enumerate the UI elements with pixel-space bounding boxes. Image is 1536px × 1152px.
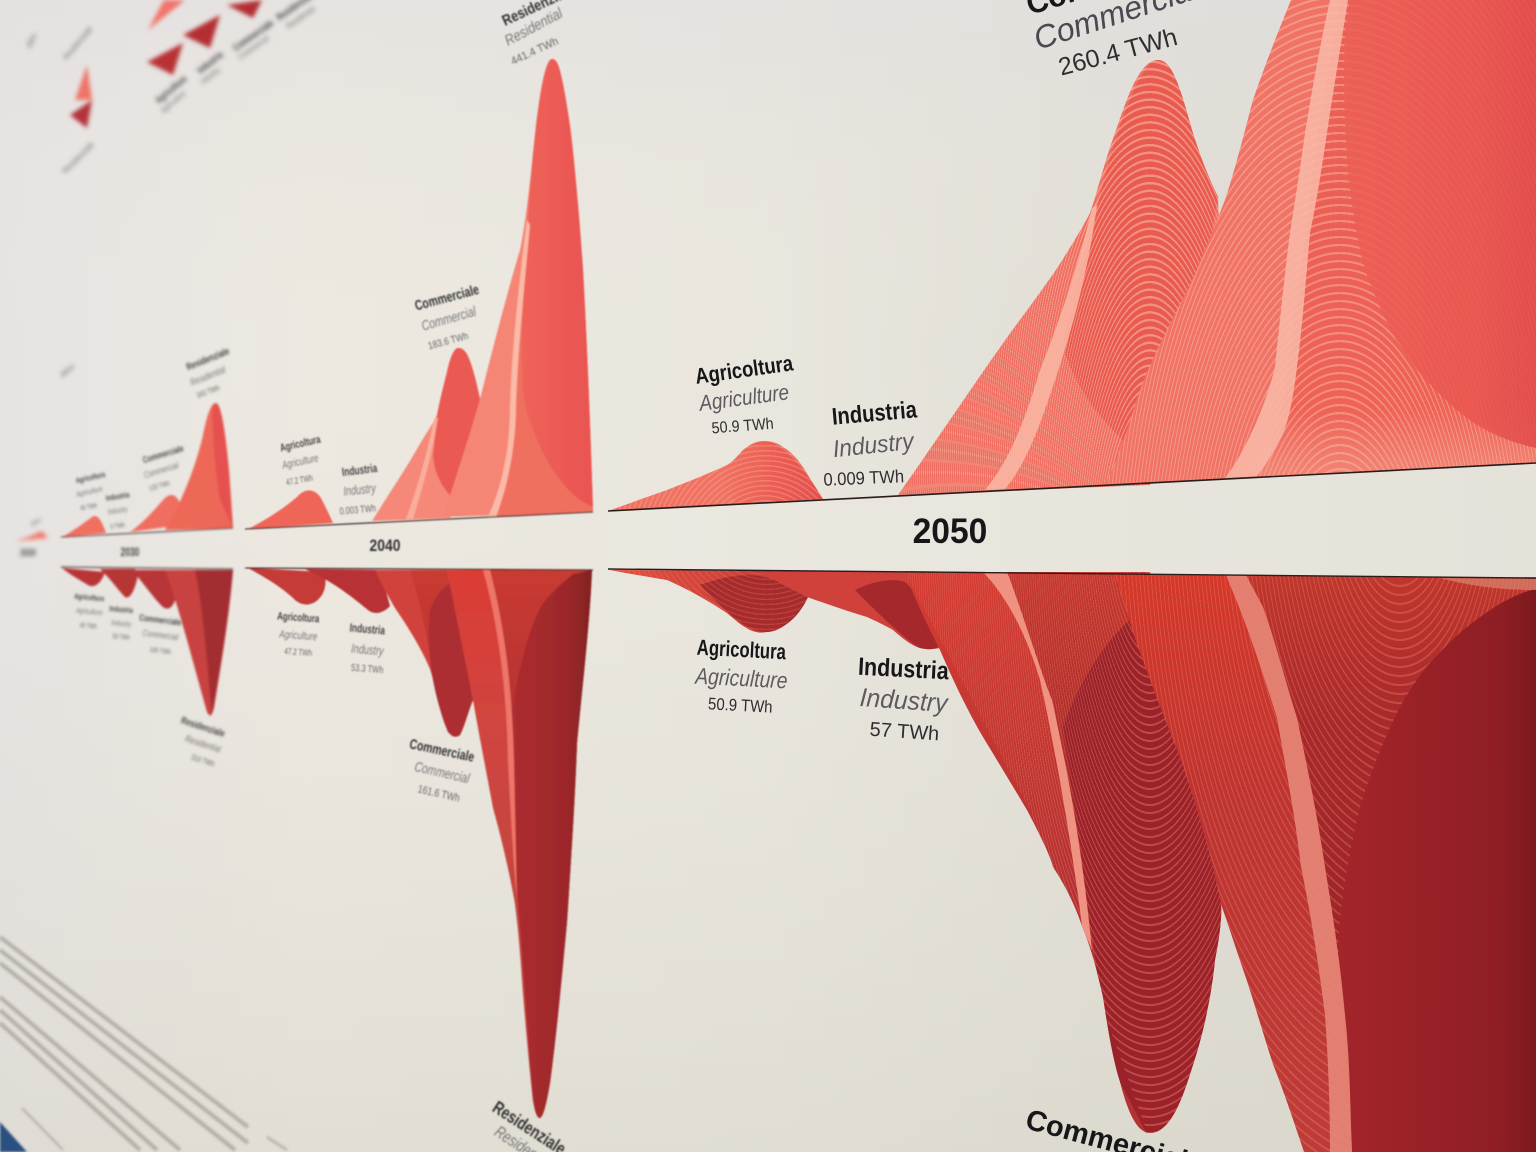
label: 2020 upper b: Altro [28, 516, 43, 529]
blue corner logo [0, 1122, 27, 1152]
label: Commerciale lower [408, 736, 476, 805]
peak: residential 2050 upper [1105, 0, 1536, 485]
peak: residential 2050 lower [1114, 574, 1536, 1152]
label: Industria upper: 0.003 TWh [339, 502, 376, 517]
label: Industria lower: Industry [111, 619, 132, 629]
label: Industria upper: 0 TWh [110, 522, 125, 531]
label: Commerciale lower: Commerciale [139, 613, 182, 628]
label: Commerciale upper: 260.4 TWh [1055, 23, 1180, 82]
label: Residenziale upper: Residenziale [185, 345, 231, 373]
label: Agricoltura lower: Agriculture [693, 664, 788, 694]
chart: 2040 wave [245, 59, 593, 1118]
label: Agricoltura lower [693, 636, 788, 717]
far labels: Commercial [236, 33, 271, 62]
baseline [608, 569, 1536, 578]
label: Residenziale upper [499, 0, 577, 68]
label: Agricoltura lower: Agriculture [75, 607, 103, 617]
baselines [245, 512, 593, 570]
label: Commerciale lower: Commerciale [408, 736, 476, 765]
labels: 2030 [74, 345, 231, 769]
label: Industria upper: Industria [831, 396, 918, 430]
label: Agricoltura lower: Agricoltura [74, 593, 104, 604]
label: Commerciale lower: Commercial [413, 759, 472, 787]
label: Residenziale upper: Residential [501, 4, 566, 49]
label: Industria lower [349, 622, 386, 676]
chart: 2020 wave with labels [16, 361, 77, 558]
label: Industria lower [109, 605, 133, 642]
year label 2050: 2050 [913, 512, 987, 551]
label: Agricoltura upper [694, 352, 795, 438]
peak: commercial 2050 lower [905, 571, 1245, 1140]
text block: blurred paragraph at bottom left [0, 937, 287, 1150]
label: Residenziale upper: 441.4 TWh [509, 35, 560, 68]
label: Agricoltura upper: 47.2 TWh [285, 473, 314, 488]
peak: industry 2030 lower [100, 569, 138, 598]
label: Residenziale lower: 310 TWh [190, 754, 215, 769]
label: Commerciale upper: Commercial [143, 460, 180, 480]
label: Industria lower: Industria [349, 622, 386, 638]
peak: commercial 2030 lower [132, 570, 178, 609]
label: Commerciale lower: 105 TWh [149, 646, 172, 657]
label: Commerciale lower: 161.6 TWh [416, 784, 461, 805]
label: Industria lower: Industry [859, 683, 950, 718]
far labels: Agriculture [158, 88, 188, 116]
far labels: Residential [284, 4, 317, 31]
label: Commerciale lower [139, 613, 182, 657]
label: Commerciale upper: Commercial [420, 303, 479, 334]
peak: residential 2030 upper [165, 403, 233, 530]
label: Industria lower: 50 TWh [112, 634, 130, 642]
peak: agriculture 2030 lower [62, 568, 105, 586]
peak: residential 2040 lower [447, 570, 592, 1118]
label: Industria lower: Industria [109, 605, 133, 615]
far labels: Altro [23, 32, 39, 50]
baselines [61, 528, 233, 569]
peak: commercial 2050 upper [898, 60, 1222, 495]
peak: agriculture 2050 upper [608, 441, 823, 511]
label: Industria lower: 53.3 TWh [351, 662, 384, 676]
label: Residenziale lower: Residential [184, 733, 223, 755]
label: Agricoltura upper: Agricoltura [279, 433, 322, 455]
label: Agricoltura upper: Agriculture [696, 380, 790, 416]
peak: commercial 2040 lower [375, 570, 473, 737]
label: Commerciale upper: Commerciale [413, 281, 481, 314]
label: Industria upper: Industry [343, 482, 378, 499]
peak: industry 2040 lower [305, 569, 390, 613]
label: 2020 upper a: Altro [57, 361, 77, 381]
peak: agriculture 2050 lower [610, 570, 808, 633]
peak: residential 2030 lower [165, 570, 233, 715]
label: Agricoltura lower: 50.9 TWh [708, 696, 773, 717]
label: Agricoltura upper: 50.9 TWh [711, 415, 774, 438]
peak: commercial 2030 upper [130, 495, 180, 532]
peak: 2020 upper [16, 531, 48, 541]
label: Industria upper: Industry [831, 427, 916, 462]
label: Industria upper: Industry [107, 506, 129, 517]
labels: 2050 upper [694, 0, 1212, 490]
label: Agricoltura upper [279, 433, 322, 488]
chart: 2050 lower wave (demand) [608, 569, 1536, 1152]
chart: 2030 wave [61, 403, 233, 715]
far section: earlier charts at top left [23, 0, 318, 176]
far labels: Industry [198, 64, 223, 87]
peak: commercial 2040 upper [372, 348, 480, 521]
far chart: small wave [70, 65, 92, 128]
label: Residenziale lower [180, 714, 226, 769]
labels: 2040 [277, 0, 577, 1152]
chart: 2050 upper wave (supply) [608, 0, 1536, 511]
peak: agriculture 2040 lower [248, 568, 326, 605]
label: Commerciale upper [1022, 0, 1212, 82]
peak: residential 2040 upper [443, 59, 593, 517]
peak: agriculture 2040 upper [248, 490, 333, 529]
label: Agricoltura upper [75, 471, 106, 513]
peak: agriculture 2030 upper [62, 516, 106, 537]
label: Agricoltura upper: Agriculture [75, 485, 104, 499]
label: Agricoltura lower [74, 593, 104, 631]
label: Industria upper [105, 491, 130, 531]
labels: 2050 lower [693, 636, 1206, 1152]
far labels: Industria [195, 49, 225, 76]
label: Industria upper: Industria [341, 463, 378, 480]
far chart: 2010 triangles [147, 0, 262, 75]
label: Industria upper [339, 463, 378, 517]
label: Agricoltura lower: Agricoltura [696, 636, 787, 665]
label: Residenziale upper [185, 345, 231, 400]
year label 2030: 2030 [121, 547, 140, 559]
far labels: Residenziale [61, 24, 95, 62]
label: Industria upper: 0.009 TWh [823, 466, 904, 490]
label: Residenziale lower: Residenziale [180, 714, 226, 739]
label: Agricoltura upper: Agricoltura [694, 352, 795, 389]
year label 2040: 2040 [370, 537, 400, 555]
label: Industria lower [857, 652, 950, 745]
label: Residenziale upper: 343 TWh [196, 385, 221, 400]
year label 2020: 2020 [20, 547, 36, 558]
baseline [608, 463, 1536, 511]
label: Agricoltura upper: Agriculture [280, 452, 320, 472]
label: Agricoltura lower [277, 610, 320, 658]
label: Agricoltura lower: 40 TWh [79, 623, 97, 631]
label: Commerciale upper: 120 TWh [148, 480, 171, 493]
label: Commerciale lower: Commercial [142, 628, 179, 642]
far labels: Commerciale [231, 17, 276, 53]
label: Industria lower: 57 TWh [869, 719, 940, 745]
label: Agricoltura lower: 47.2 TWh [284, 646, 312, 658]
label: Industria lower: Industria [857, 652, 950, 685]
label: Industria upper [823, 396, 918, 490]
peak: industry 2050 lower [757, 571, 948, 649]
far labels: Agricoltura [153, 73, 189, 106]
label: Industria upper: Industria [105, 491, 130, 503]
label: Industria lower: Industry [351, 642, 385, 659]
far labels [23, 0, 318, 176]
label: Residenziale upper: Residential [188, 363, 228, 388]
far labels: Residenziale [60, 140, 96, 176]
label: Commerciale upper [141, 443, 185, 493]
label: Commerciale upper: 183.6 TWh [427, 330, 470, 351]
label: Agricoltura lower: Agriculture [278, 628, 318, 644]
label: Commerciale upper [413, 281, 481, 351]
label: Agricoltura upper: 40 TWh [80, 503, 98, 513]
label: Commerciale upper: Commerciale [141, 443, 185, 465]
label: Agricoltura upper: Agricoltura [75, 471, 106, 486]
label: Agricoltura lower: Agricoltura [277, 610, 320, 626]
